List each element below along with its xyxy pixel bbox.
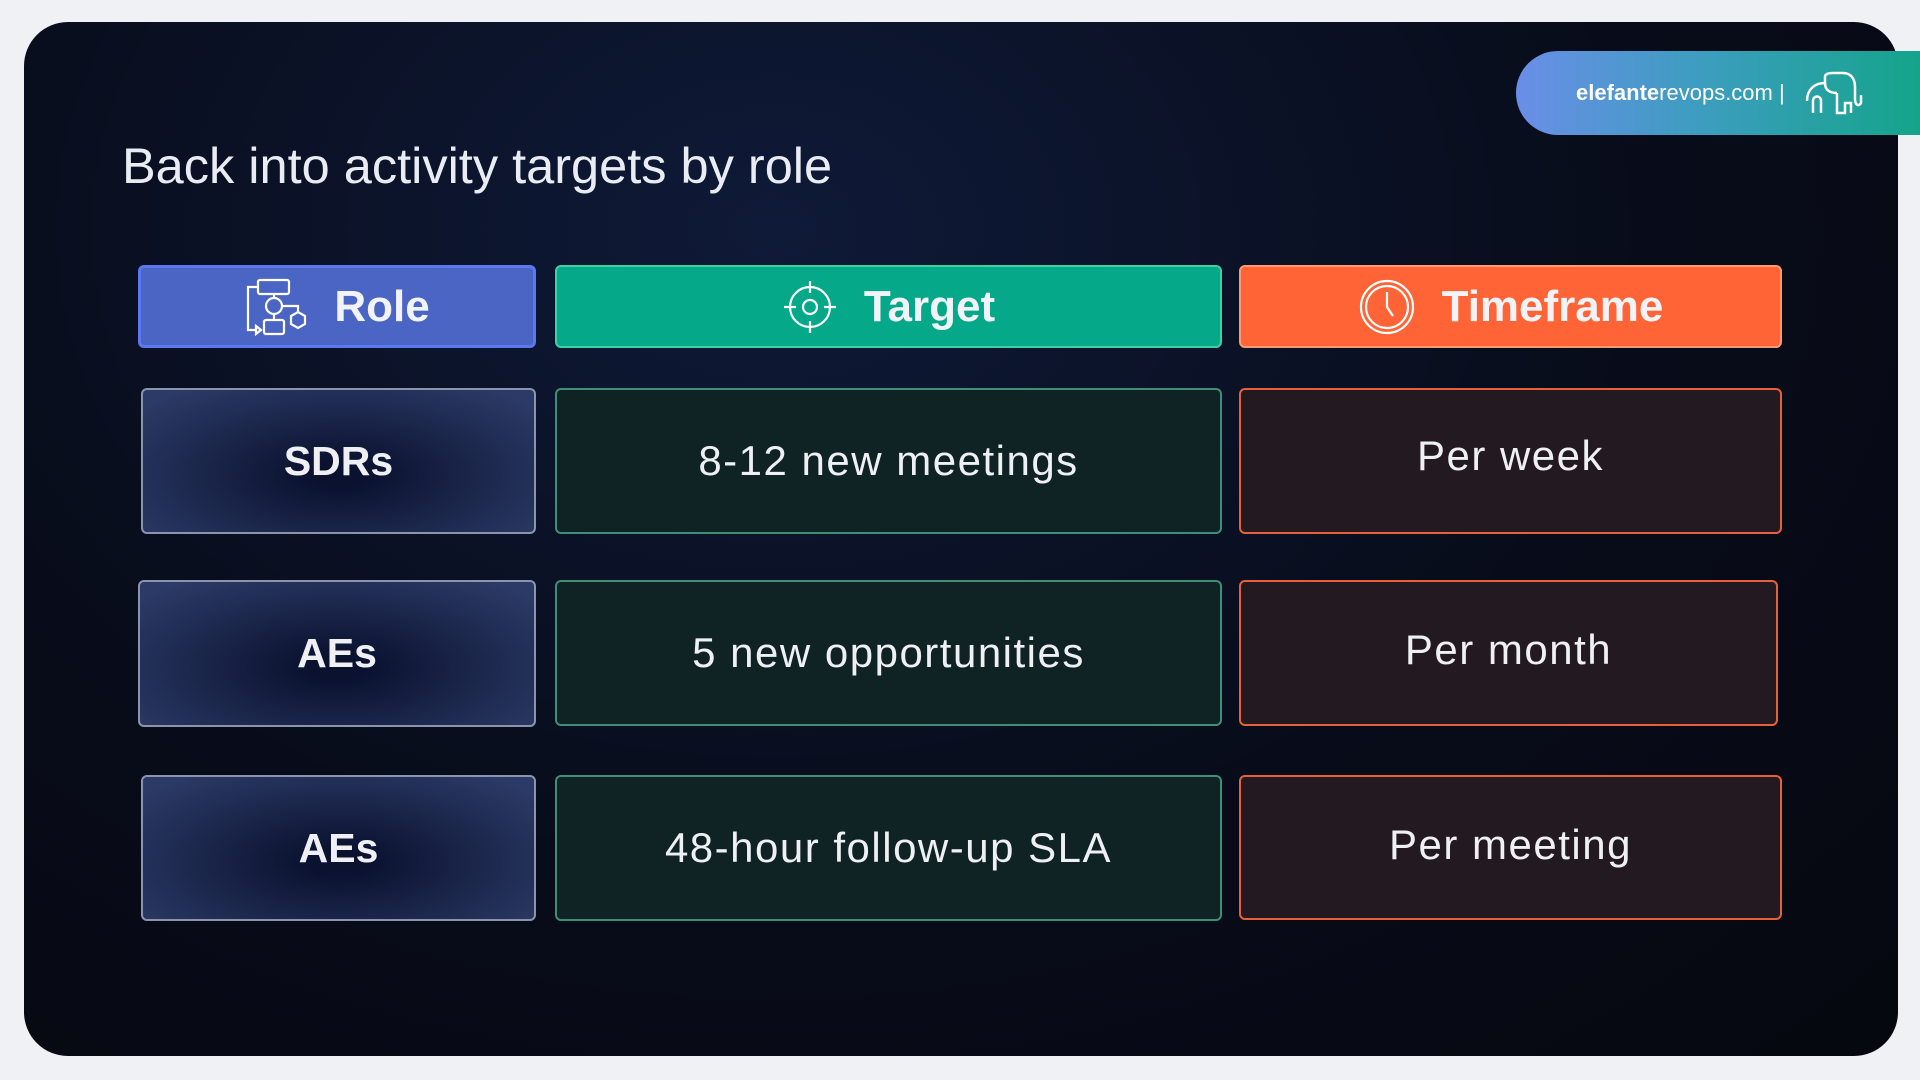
row 2 timeframe — [1239, 580, 1778, 726]
header: Target: Target — [864, 282, 995, 330]
row 2 timeframe: Per month — [1405, 626, 1612, 673]
title: Back into activity targets by role — [122, 137, 832, 194]
row 2: AEs: AEs — [297, 630, 377, 676]
header: Timeframe: Timeframe — [1442, 282, 1663, 330]
row 3 timeframe — [1239, 775, 1782, 920]
row 2: AEs — [138, 580, 536, 727]
row 3: AEs — [141, 775, 536, 921]
row 3 timeframe: Per meeting — [1389, 820, 1632, 868]
header: Role — [138, 265, 536, 348]
header: Target — [555, 265, 1222, 348]
header: Timeframe — [1239, 265, 1782, 348]
row 1 timeframe — [1239, 388, 1782, 534]
row 1: SDRs: SDRs — [284, 438, 393, 484]
row 2 target: 5 new opportunities — [692, 629, 1085, 676]
row 1 target — [555, 388, 1222, 534]
row 3 target: 48-hour follow-up SLA — [665, 824, 1112, 871]
logo pill: elefante — [1576, 80, 1659, 105]
logo pill — [1516, 51, 1920, 135]
row 2 target — [555, 580, 1222, 726]
row 3: AEs: AEs — [299, 824, 378, 870]
header: Role: Role — [334, 282, 430, 330]
row 3 target — [555, 775, 1222, 921]
row 1 timeframe: Per week — [1417, 432, 1604, 479]
row 1: SDRs — [141, 388, 536, 534]
row 1 target: 8-12 new meetings — [698, 437, 1079, 484]
logo pill: revops.com | — [1659, 80, 1785, 105]
